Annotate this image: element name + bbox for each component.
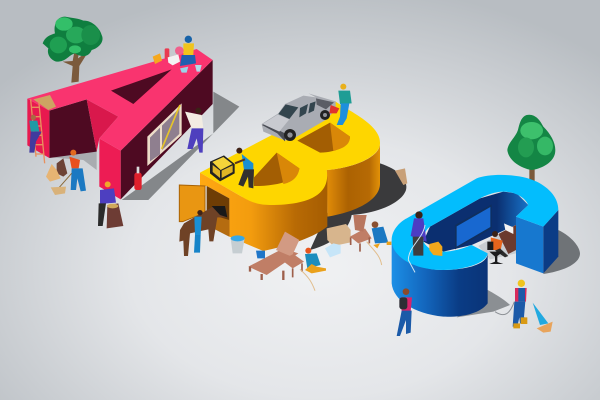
person at horse bbox=[194, 210, 203, 253]
C outer walls bbox=[392, 210, 558, 317]
person on B top bbox=[337, 84, 352, 125]
side table bbox=[282, 254, 304, 277]
window bbox=[147, 103, 182, 166]
person with generator bbox=[235, 148, 254, 188]
person kneeling bbox=[367, 221, 391, 265]
roof objects bbox=[153, 46, 202, 73]
tree: A bbox=[43, 17, 103, 83]
floor shadow and desk bbox=[478, 223, 516, 259]
small box behind bbox=[395, 168, 407, 185]
pickup truck bbox=[262, 93, 339, 141]
B lower lobe wall bbox=[200, 173, 327, 251]
letter C group bbox=[392, 115, 580, 336]
person on roof bbox=[180, 36, 196, 66]
person with hose bbox=[495, 280, 527, 328]
letter A group bbox=[27, 17, 239, 228]
open door bbox=[179, 185, 205, 222]
water bottles bbox=[325, 243, 341, 257]
leaves on roof bbox=[33, 95, 56, 110]
letter B group bbox=[179, 84, 407, 291]
radio bbox=[429, 242, 442, 256]
person with rope bbox=[300, 248, 326, 291]
person at desk bbox=[487, 231, 508, 264]
ladder bbox=[31, 99, 45, 163]
shadows: C bbox=[457, 230, 580, 317]
person with sack bbox=[98, 181, 123, 228]
A side walls bbox=[27, 60, 213, 199]
person with backpack bbox=[397, 288, 412, 336]
horse bbox=[179, 206, 227, 256]
person on C bbox=[408, 211, 427, 272]
cardboard box bbox=[327, 224, 351, 246]
bucket bbox=[231, 235, 245, 253]
tree: C bbox=[507, 115, 555, 182]
debris bbox=[537, 322, 553, 333]
B upper hole bbox=[297, 123, 350, 153]
A hole bbox=[111, 69, 172, 104]
leaf bags bbox=[46, 158, 67, 195]
second chair bbox=[350, 215, 372, 252]
C inner wall bbox=[423, 192, 528, 252]
person at window bbox=[185, 108, 203, 153]
generator bbox=[210, 155, 235, 181]
person with rake bbox=[59, 150, 86, 191]
C screen bbox=[455, 204, 492, 249]
B right lobe wall bbox=[327, 143, 380, 217]
shadow: B bbox=[310, 163, 406, 250]
fire extinguisher bbox=[134, 167, 142, 190]
B doorway bbox=[207, 186, 229, 237]
water spray bbox=[533, 303, 548, 325]
C top face bbox=[392, 175, 558, 270]
person on ladder bbox=[29, 115, 42, 153]
shadow: A bbox=[122, 92, 239, 200]
A top face bbox=[27, 49, 213, 151]
B top face bbox=[200, 102, 380, 205]
deck chair bbox=[248, 232, 299, 280]
B lower hole bbox=[254, 153, 299, 186]
